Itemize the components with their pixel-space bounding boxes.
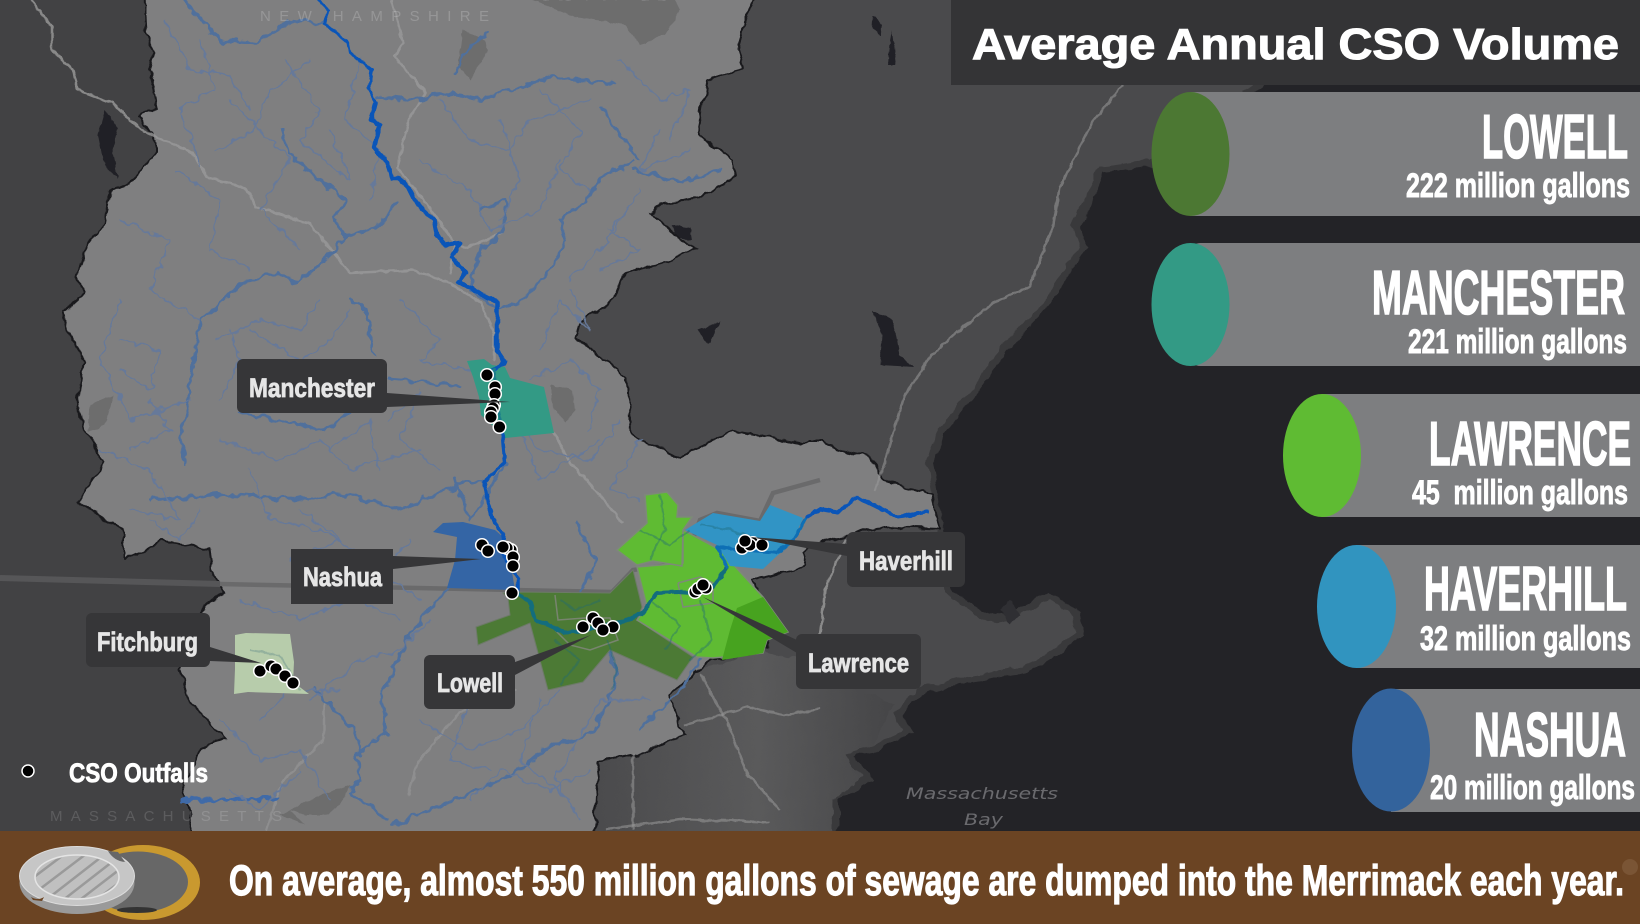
town polygons	[234, 359, 803, 694]
title: Average Annual CSO Volume	[972, 20, 1619, 69]
bar: Haverhill	[1317, 545, 1640, 668]
state line	[0, 480, 820, 592]
callout: Lawrence	[703, 597, 921, 689]
bar: Manchester	[1152, 243, 1640, 366]
callout: Manchester: Manchester	[249, 373, 375, 403]
Fitchburg area	[234, 633, 309, 694]
callout: Nashua	[291, 549, 481, 604]
watershed area	[0, 0, 1123, 836]
Nashua area	[433, 522, 515, 590]
Lowell centre outline	[555, 595, 618, 650]
Massachusetts label: MASSACHUSETTS	[50, 808, 282, 825]
callout: Fitchburg	[86, 613, 261, 667]
callout: Lowell: Lowell	[437, 668, 503, 698]
roads	[31, 0, 1123, 829]
callout: Lowell	[424, 635, 591, 709]
bar: Lawrence	[1283, 394, 1640, 517]
Merrimack River	[319, 0, 927, 633]
callout: Haverhill: Haverhill	[859, 546, 953, 576]
Lawrence area north	[617, 492, 692, 566]
Manchester area	[467, 359, 554, 438]
bar: Nashua	[1352, 688, 1640, 812]
callout: Manchester	[237, 359, 510, 413]
callout: Nashua: Nashua	[303, 562, 383, 592]
gray lake patches	[88, 0, 680, 825]
bar: Lowell	[1152, 92, 1640, 216]
tributaries	[100, 0, 722, 825]
land mass	[0, 0, 1300, 840]
Massachusetts Bay label: Bay	[964, 810, 1004, 829]
callout: Lawrence: Lawrence	[808, 648, 909, 678]
dark lakes	[98, 15, 1020, 625]
CSO outfall markers	[254, 369, 768, 689]
callout: Haverhill	[750, 532, 965, 587]
North Andover darker area	[722, 597, 788, 660]
Lawrence area south	[637, 530, 788, 658]
tributaries showing through towns	[250, 495, 760, 690]
map place labels	[50, 8, 1058, 829]
west state line on dark land	[0, 578, 220, 584]
Lowell area	[476, 570, 693, 690]
Haverhill markers	[736, 535, 768, 554]
Lowell markers	[577, 612, 619, 636]
Manchester markers	[481, 369, 506, 433]
Fitchburg markers	[254, 660, 299, 689]
callout: Fitchburg: Fitchburg	[97, 627, 198, 657]
legend: CSO Outfalls: CSO Outfalls	[69, 758, 208, 788]
legend: CSO Outfalls	[22, 758, 208, 788]
title	[951, 0, 1640, 85]
footer banner	[0, 831, 1640, 924]
icon: manhole cover	[20, 845, 200, 920]
Massachusetts Bay label: Massachusetts	[906, 784, 1058, 803]
west dark land	[0, 0, 260, 840]
Lawrence markers	[689, 579, 712, 598]
New Hampshire label: NEW HAMPSHIRE	[260, 8, 489, 25]
Haverhill area	[685, 505, 803, 569]
Massachusetts Bay label	[906, 784, 1058, 829]
south-east lighter land	[590, 650, 895, 836]
Nashua markers	[476, 539, 519, 599]
Lawrence centre outline	[678, 577, 713, 607]
